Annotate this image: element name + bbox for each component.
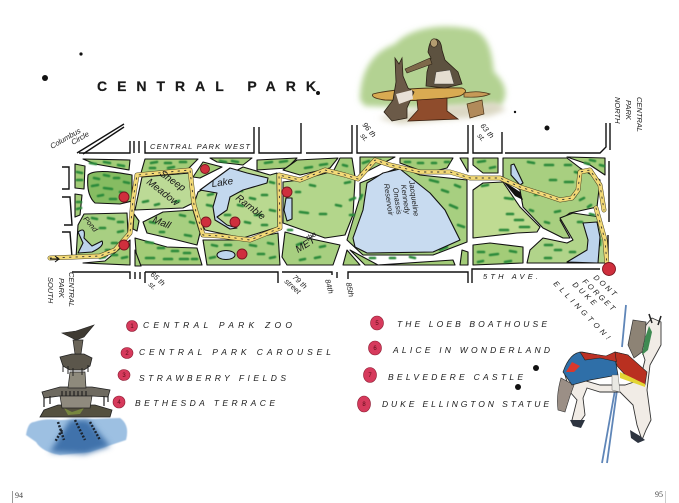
legend text: BETHESDA TERRACE <box>135 398 275 408</box>
legend marker numbers: 2 <box>125 351 129 357</box>
street labels: Circle <box>70 129 91 147</box>
map labels: Pond <box>81 215 100 234</box>
street labels: Columbus <box>48 126 82 151</box>
map labels: Jacqueline <box>407 179 421 217</box>
legend marker numbers: 5 <box>375 321 379 327</box>
street labels: CENTRAL <box>67 272 76 307</box>
street labels: SOUTH <box>46 277 55 304</box>
dark ravine <box>502 180 523 200</box>
map labels: Onassis <box>391 187 404 215</box>
page number right <box>655 490 666 503</box>
callout: Don't forget Duke Ellington: ELLINGTON! <box>552 279 613 342</box>
callout: Don't forget Duke Ellington: DUKE <box>571 280 599 308</box>
street labels: 5TH AVE. <box>483 272 538 281</box>
map labels <box>81 168 421 256</box>
legend text: CENTRAL PARK ZOO <box>143 320 292 330</box>
legend marker numbers: 6 <box>373 346 377 352</box>
map labels: the <box>304 230 318 243</box>
legend text: CENTRAL PARK CAROUSEL <box>139 347 331 357</box>
illustration: Bethesda Fountain <box>26 325 127 455</box>
street labels: CENTRAL PARK WEST <box>150 142 251 151</box>
callout: Don't forget Duke Ellington: DONT <box>592 273 620 299</box>
map labels: MET <box>294 235 318 256</box>
street labels: PARK <box>624 100 633 121</box>
map labels: Meadow <box>144 177 181 209</box>
decorative ink dots <box>42 52 550 390</box>
legend marker numbers: 8 <box>362 402 366 408</box>
page number left <box>12 491 23 503</box>
map labels: Sheep <box>157 168 188 194</box>
illustration: carousel horse <box>557 305 661 463</box>
legend marker numbers: 3 <box>122 373 126 379</box>
legend text: DUKE ELLINGTON STATUE <box>382 399 549 409</box>
street labels: NORTH <box>613 97 622 124</box>
street labels: 65 th <box>149 270 167 288</box>
legend text: STRAWBERRY FIELDS <box>139 373 286 383</box>
street labels: 96 th <box>360 121 378 139</box>
illustration: Alice in Wonderland statue <box>360 27 506 124</box>
park block outlines <box>75 157 607 266</box>
map labels: Kennedy <box>399 184 412 216</box>
horse body <box>565 318 661 440</box>
water: small ponds <box>217 164 600 263</box>
map location markers <box>119 164 616 276</box>
map labels: Mall <box>151 215 173 232</box>
callout: Don't forget Duke Ellington: FORGET <box>581 277 618 314</box>
title: CENTRAL PARK <box>97 78 316 94</box>
legend marker numbers <box>117 321 379 408</box>
street labels: 85th <box>344 282 356 298</box>
legend text: BELVEDERE CASTLE <box>388 372 523 382</box>
map: park grounds <box>75 157 607 266</box>
legend markers <box>113 316 384 412</box>
legend text <box>135 319 550 409</box>
street labels: CENTRAL <box>635 97 644 132</box>
legend marker numbers: 7 <box>368 373 372 379</box>
street labels: 63 th <box>478 122 496 140</box>
page number left: 94 <box>15 491 23 500</box>
yellow walking route <box>50 160 607 265</box>
horse pole <box>602 305 626 463</box>
street labels: st. <box>358 132 370 143</box>
page number right: 95 <box>655 490 663 499</box>
street labels: st. <box>475 132 487 143</box>
water: Jacqueline Kennedy Onassis Reservoir <box>353 169 460 253</box>
arrow: route start <box>50 256 59 262</box>
street labels <box>46 97 644 307</box>
map labels: Lake <box>211 176 234 190</box>
street labels: 79 th <box>291 273 309 291</box>
street labels: 84th <box>323 278 336 295</box>
trees <box>77 160 604 262</box>
legend text: THE LOEB BOATHOUSE <box>397 319 547 329</box>
street labels: PARK <box>57 278 66 299</box>
legend text: ALICE IN WONDERLAND <box>392 345 550 355</box>
map roads: outer street lines <box>62 123 610 283</box>
street labels: street <box>283 277 303 297</box>
water: the Pond <box>78 230 103 253</box>
legend marker numbers: 4 <box>117 400 121 406</box>
legend <box>113 316 550 412</box>
map labels: Reservoir <box>382 183 395 217</box>
water: the Lake <box>200 168 268 229</box>
street labels: st. <box>147 280 159 292</box>
horse saddle <box>563 352 618 385</box>
legend marker numbers: 1 <box>130 324 134 330</box>
map labels: Ramble <box>233 193 267 223</box>
